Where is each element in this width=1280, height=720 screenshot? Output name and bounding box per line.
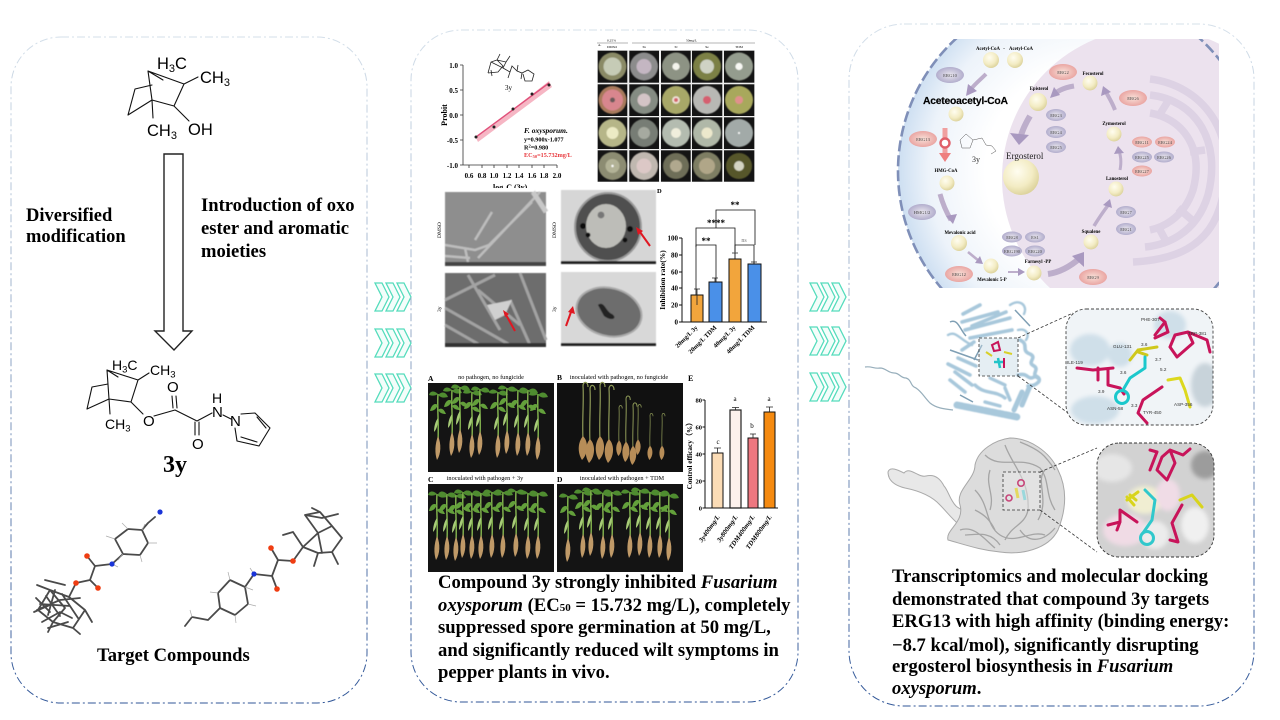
crystal structure two <box>185 508 342 626</box>
metabolite labels <box>935 47 1129 283</box>
chart: probit regression: 0.8 <box>478 172 487 180</box>
chevrons: middle to right <box>810 283 846 401</box>
chart: inhibition rate bars: 40mg/L TDM <box>725 324 756 356</box>
chart: probit regression: F. oxysporum. <box>524 126 568 135</box>
chart: inhibition rate bars: 60 <box>671 268 678 276</box>
photo A: no pathogen, no fungicide: no pathogen, no fungicide <box>458 374 524 381</box>
inset: binding site surface <box>1092 443 1219 557</box>
metabolite labels: HMG-CoA <box>935 169 958 174</box>
label: diversified modification: Diversified <box>26 206 112 226</box>
chart: control efficacy bars: 3y400mg/L <box>697 514 722 545</box>
label: introduction of oxo ester: moieties <box>201 241 266 262</box>
chevrons: left to middle <box>375 283 411 402</box>
enzyme labels: ERG6 <box>1127 96 1139 101</box>
figure: plate assay grid: A. <box>598 43 602 47</box>
panel: mechanism of action <box>849 0 1280 706</box>
enzyme labels: ERG2 <box>1057 70 1069 75</box>
chart: inhibition rate bars: ** <box>702 236 711 246</box>
figure: plate assay grid: DMSO <box>607 45 618 49</box>
chart: probit regression: Probit <box>440 104 449 126</box>
enzyme labels: ERG27 <box>1135 169 1150 174</box>
structure: compound 3y: O <box>192 436 204 453</box>
chart: inhibition rate bars: ** <box>730 200 740 210</box>
enzyme labels <box>914 70 1173 280</box>
structure: starting alcohol: 3 <box>171 130 177 142</box>
pathway arrows <box>940 74 1121 274</box>
figure: plate assay grid: 3v <box>674 45 678 49</box>
chart: control efficacy bars <box>685 374 778 551</box>
figure: plate assay grid <box>597 38 755 182</box>
chart: control efficacy bars: TDM800mg/L <box>745 514 774 551</box>
enzyme labels: ERG20 <box>1028 249 1043 254</box>
enzyme labels: ERG26 <box>1157 155 1172 160</box>
metabolite labels: Squalene <box>1082 230 1100 235</box>
figure: plate assay grid: 50mg/L <box>686 38 697 42</box>
inset: binding site ribbon: TYR-450 <box>1143 410 1162 415</box>
inset: binding site ribbon: ASP-356 <box>1174 402 1193 407</box>
chart: control efficacy bars: 60 <box>696 424 702 432</box>
arrow: synthesis direction <box>155 154 192 350</box>
enzyme labels: ERG5 <box>1050 145 1062 150</box>
structure: starting alcohol <box>128 55 230 142</box>
enzyme labels: ERG13 <box>916 137 931 142</box>
enzyme labels: HMG1/2 <box>914 210 931 215</box>
chart: probit regression: 1.0 <box>449 62 458 70</box>
chart: control efficacy bars: 80 <box>696 398 702 404</box>
inset: binding site ribbon: GLU-131 <box>1113 344 1132 349</box>
photo A: no pathogen, no fungicide <box>428 374 554 472</box>
structure: starting alcohol: H <box>157 55 169 73</box>
inset: binding site ribbon: 5.2 <box>1160 367 1167 372</box>
chart: probit regression: 50 <box>533 154 538 159</box>
structure: starting alcohol: 3 <box>169 63 175 75</box>
structure: compound 3y: C <box>127 357 138 373</box>
figure: plate assay grid: 0.25% <box>607 38 616 42</box>
structure: compound 3y <box>87 357 270 453</box>
metabolite labels: Acetyl-CoA <box>1009 47 1034 52</box>
structure: compound 3y: H <box>212 390 222 406</box>
enzyme labels: ERG3 <box>1050 113 1062 118</box>
structure: starting alcohol: OH <box>188 121 213 139</box>
chart: probit regression: R <box>524 144 528 152</box>
inset: binding site ribbon: 3.7 <box>1155 357 1162 362</box>
chart: inhibition rate bars <box>657 188 767 356</box>
figure: plate assay grid: 9e <box>705 45 709 49</box>
inset: binding site ribbon: 3.6 <box>1141 342 1148 347</box>
photo A: no pathogen, no fungicide: A <box>428 374 434 383</box>
photo C: inoculated with pathogen + 3y: inoculated with pathogen + 3y <box>447 475 524 482</box>
chart: probit regression: =15.732mg/L <box>537 152 572 159</box>
metabolite labels: Mevalonic acid <box>944 231 976 236</box>
chart: probit regression: 0.5 <box>449 87 458 95</box>
metabolite labels: - <box>1003 47 1005 52</box>
metabolite spheres <box>940 52 1124 280</box>
chart: control efficacy bars: Control efficacy（%） <box>685 419 694 489</box>
chart: probit regression: log C (3y) <box>493 183 528 192</box>
photo C: inoculated with pathogen + 3y: C <box>428 475 433 484</box>
structure: compound 3y: CH <box>150 362 170 378</box>
structure: starting alcohol: CH <box>147 122 171 140</box>
chart: control efficacy bars: 20 <box>696 478 702 486</box>
inset: binding site ribbon: TRP-381 <box>1188 331 1207 336</box>
photo C: inoculated with pathogen + 3y <box>428 475 554 572</box>
enzyme labels: ERG12 <box>952 272 967 277</box>
label: target compounds: Target Compounds <box>97 645 250 666</box>
endoplasmic reticulum arcs <box>1133 79 1226 262</box>
metabolite labels: Episterol <box>1030 87 1049 92</box>
structure: compound 3y: O <box>143 413 155 430</box>
text: mechanism conclusion: oxysporum. <box>892 678 981 699</box>
chart: control efficacy bars: E <box>688 374 693 383</box>
photo D: inoculated with pathogen + TDM <box>557 475 683 572</box>
metabolite labels: Zymosterol <box>1102 122 1126 127</box>
text: activity conclusion: oxysporum (EC50 = 15.732 mg/L), completely <box>438 595 790 616</box>
chart: inhibition rate bars: 40 <box>671 284 678 292</box>
enzyme ovals <box>908 67 1174 256</box>
text: mechanism conclusion: ERG13 with high affinity (binding energy: <box>892 611 1229 632</box>
chart: probit regression: 1.6 <box>528 172 537 180</box>
chart: probit regression: 1.2 <box>503 172 512 180</box>
text: activity conclusion: pepper plants in vivo. <box>438 662 610 683</box>
inset: binding site ribbon: ILE-119 <box>1067 360 1083 365</box>
inset: binding site ribbon: 3.6 <box>1120 370 1127 375</box>
crystal structure one <box>34 509 163 634</box>
enzyme labels: ERG24 <box>1158 140 1173 145</box>
figure: SEM images <box>437 192 546 347</box>
structure: compound 3y: CH <box>105 416 125 432</box>
callout lines: ribbon inset <box>1018 313 1073 413</box>
chart: probit regression <box>440 62 572 192</box>
enzyme labels: ERG8 <box>1006 235 1018 240</box>
inhibited ERG13 arrow <box>939 128 951 162</box>
text: mechanism conclusion: demonstrated that compound 3y targets <box>892 589 1209 610</box>
chart: control efficacy bars: TDM400mg/L <box>728 514 757 551</box>
photo B: inoculated with pathogen, no fungicide: B <box>557 373 562 382</box>
metabolite labels: Fecosterol <box>1083 72 1104 77</box>
chart: control efficacy bars: a <box>767 395 771 403</box>
inset: binding site ribbon: 3.3 <box>1131 403 1138 408</box>
chart: probit regression: 0.0 <box>449 112 458 120</box>
chart: probit regression: EC <box>524 152 533 159</box>
figure: ergosterol biosynthesis pathway: Ergosterol <box>1006 151 1044 161</box>
structure: compound 3y: N <box>230 413 241 430</box>
chart: inhibition rate bars: 100 <box>668 234 678 242</box>
chart: probit regression: -1.0 <box>447 162 458 170</box>
enzyme labels: ERG10 <box>943 73 958 78</box>
text: mechanism conclusion: ergosterol biosynthesis in Fusarium <box>892 656 1173 677</box>
icon: small 3y structure: 3y <box>505 84 512 92</box>
enzyme labels: ERG25 <box>1135 155 1150 160</box>
chart: probit regression: =0.980 <box>531 144 548 152</box>
enzyme labels: ERG9 <box>1087 275 1099 280</box>
figure: ergosterol biosynthesis pathway: Aceteoacetyl-CoA <box>923 96 1008 107</box>
callout lines: surface inset <box>1040 448 1097 552</box>
inset: binding site ribbon: PHE-307 <box>1141 317 1160 322</box>
inset: binding site ribbon <box>1066 309 1219 425</box>
chart: probit regression: 2 <box>528 144 531 148</box>
metabolite labels: Lanosterol <box>1106 177 1129 182</box>
figure: ergosterol biosynthesis pathway <box>896 39 1219 288</box>
figure: plate assay grid: TDM <box>735 45 744 49</box>
chart: control efficacy bars: a <box>733 395 737 403</box>
text: mechanism conclusion: Transcriptomics and molecular docking <box>892 566 1209 587</box>
enzyme labels: ERG1 <box>1120 227 1132 232</box>
chart: inhibition rate bars: D <box>657 188 662 195</box>
chart: probit regression: 1.0 <box>490 172 499 180</box>
metabolite labels: Farnesyl -PP <box>1025 260 1051 265</box>
chart: control efficacy bars: c <box>716 438 720 446</box>
label: 3y: 3y <box>163 452 187 478</box>
figure: SEM images: DMSO <box>437 222 443 238</box>
figure: surface protein model <box>888 438 1065 553</box>
figure: plate assay grid: 3n <box>642 45 646 49</box>
panel: synthesis of target compounds <box>11 37 367 703</box>
chart: control efficacy bars: 0 <box>699 506 702 512</box>
photo B: inoculated with pathogen, no fungicide: inoculated with pathogen, no fungicide <box>570 374 668 381</box>
chart: inhibition rate bars: ns <box>741 238 747 244</box>
figure: TEM images: 3y <box>552 306 558 312</box>
structure: starting alcohol: C <box>175 55 187 73</box>
figure: ribbon protein model <box>865 302 1039 417</box>
structure: compound 3y: N <box>212 404 223 421</box>
photo D: inoculated with pathogen + TDM: inoculated with pathogen + TDM <box>580 475 665 482</box>
label: introduction of oxo ester: ester and aromatic <box>201 218 349 239</box>
enzyme labels: ERG7 <box>1120 210 1132 215</box>
structure: compound 3y: O <box>167 379 179 396</box>
chart: inhibition rate bars: 20 <box>671 302 678 310</box>
inset: binding site ribbon: 3.9 <box>1098 389 1105 394</box>
chart: inhibition rate bars: 20mg/L 3y <box>674 324 700 350</box>
structure: starting alcohol: CH <box>200 69 224 87</box>
chart: probit regression: 1.8 <box>540 172 549 180</box>
figure: TEM images <box>552 190 656 346</box>
chart: probit regression: 0.6 <box>465 172 474 180</box>
chart: control efficacy bars: 40 <box>696 452 702 458</box>
chart: inhibition rate bars: 0 <box>674 318 678 326</box>
chart: inhibition rate bars: 80 <box>671 252 678 260</box>
panel: antifungal activity <box>411 30 798 702</box>
text: activity conclusion: and significantly reduced wilt symptoms in <box>438 640 780 661</box>
photo D: inoculated with pathogen + TDM: D <box>557 475 563 484</box>
label: diversified modification: modification <box>26 227 126 247</box>
chart: probit regression: 2.0 <box>553 172 562 180</box>
icon: small 3y structure <box>488 54 534 92</box>
structure: compound 3y: H <box>112 357 122 373</box>
structure: compound 3y: 3 <box>125 424 131 434</box>
chart: probit regression: -0.5 <box>447 137 458 145</box>
enzyme labels: ERG4 <box>1050 130 1062 135</box>
photo B: inoculated with pathogen, no fungicide <box>557 373 683 472</box>
chart: probit regression: 1.4 <box>515 172 524 180</box>
enzyme labels: ERG190 <box>1004 249 1021 254</box>
metabolite labels: Acetyl-CoA <box>976 47 1001 52</box>
structure: compound 3y: 3 <box>170 370 176 380</box>
chart: control efficacy bars: b <box>750 422 754 430</box>
structure: starting alcohol: 3 <box>224 77 230 89</box>
text: activity conclusion: Compound 3y strongly inhibited Fusarium <box>438 572 777 593</box>
text: mechanism conclusion: −8.7 kcal/mol), significantly disrupting <box>892 635 1199 656</box>
figure: SEM images: 3y <box>437 306 443 312</box>
enzyme labels: ES1 <box>1031 235 1040 240</box>
metabolite labels: Mevalonic 5-P <box>977 278 1007 283</box>
inset: binding site ribbon: ASN-58 <box>1107 406 1124 411</box>
label: introduction of oxo ester: Introduction of oxo <box>201 195 355 216</box>
text: activity conclusion: suppressed spore germination at 50 mg/L, <box>438 617 771 638</box>
chart: inhibition rate bars: Inhibition rate(%) <box>658 250 667 310</box>
chart: probit regression: y=0.900x-1.077 <box>524 136 564 144</box>
structure: compound 3y: 3 <box>122 364 127 376</box>
chart: inhibition rate bars: 40mg/L 3y <box>712 324 738 350</box>
enzyme labels: ERG11 <box>1135 140 1150 145</box>
chart: inhibition rate bars: **** <box>707 218 726 228</box>
chart: inhibition rate bars: 20mg/L TDM <box>687 324 718 356</box>
chart: control efficacy bars: 3y800mg/L <box>715 514 740 545</box>
figure: TEM images: DMSO <box>552 222 558 238</box>
figure: ergosterol biosynthesis pathway: 3y <box>972 155 980 164</box>
